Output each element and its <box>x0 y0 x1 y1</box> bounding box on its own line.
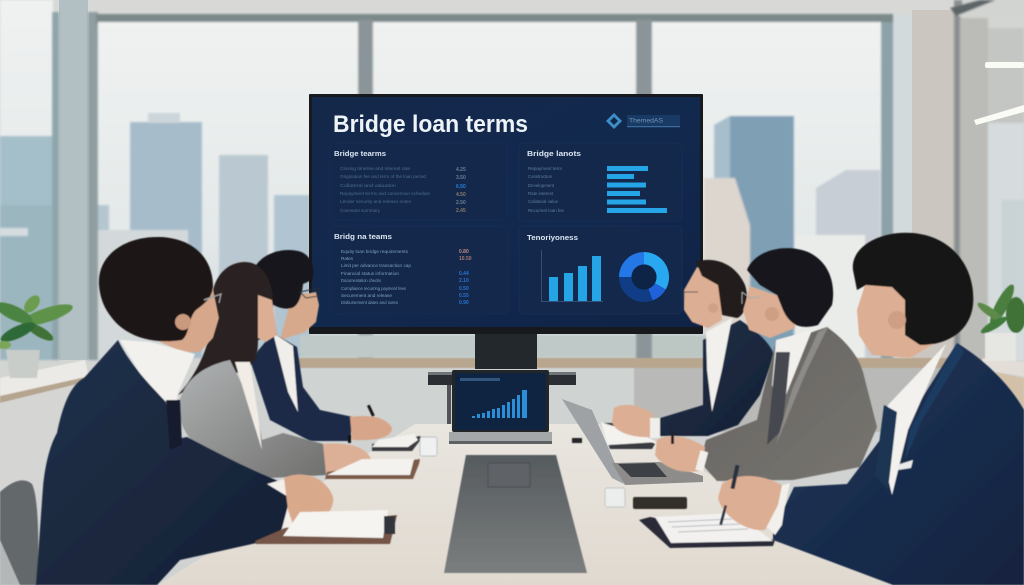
panel: charts <box>519 226 682 314</box>
plant: right <box>975 282 1024 361</box>
person: front left man <box>36 237 333 585</box>
panel: loan terms list: Securement and release <box>341 293 393 298</box>
panel: loan terms list: Equity loan bridge requirements <box>341 249 409 254</box>
laptop chart <box>472 390 527 418</box>
panel: bridge terms: 2.50 <box>456 200 466 206</box>
panel: bridge terms: Lender security and release notes <box>340 199 412 204</box>
panel: loan terms list: Documentation checks <box>341 278 382 283</box>
donut chart <box>619 252 669 302</box>
person: woman in grey <box>178 262 372 480</box>
column chart <box>541 250 603 302</box>
panel: bridge terms: Covenant summary <box>340 208 381 213</box>
person: middle right man in grey <box>655 248 877 481</box>
ceiling lights <box>974 62 1024 125</box>
horizontal bar chart <box>607 166 667 213</box>
clipboard: rear left <box>372 434 422 451</box>
panel: bridge terms: Repayment terms and conversion schedule <box>340 191 431 196</box>
panel: loan terms list: 0.90 <box>459 300 469 306</box>
panel: loan terms list: 0.80 <box>459 249 469 255</box>
wall display <box>309 94 703 334</box>
window sill <box>0 358 1024 490</box>
clipboard: front right <box>639 513 775 548</box>
person: back left man <box>250 250 392 441</box>
smartphone <box>633 497 687 509</box>
panel: loan terms list: 0.55 <box>459 293 469 299</box>
panel: bridge terms: 2.45 <box>456 208 466 214</box>
clipboard: rear right <box>572 422 657 449</box>
panel: loan terms list: Rates <box>341 256 354 261</box>
plant: left <box>0 292 75 378</box>
water glass: left <box>420 437 437 456</box>
panel: bridge loans bars: Collateral value <box>528 199 558 204</box>
panel: bridge loans bars: Bridge lanots <box>527 149 581 158</box>
front laptop <box>449 370 552 444</box>
logo and badge <box>606 113 680 129</box>
panel: bridge terms: Origination fee and term of the loan period <box>340 174 426 179</box>
panel: bridge terms: 4.50 <box>456 192 466 198</box>
panel: loan terms list: Compliance recurring payment fees <box>341 286 407 291</box>
panel: bridge terms: 4.25 <box>456 167 466 173</box>
panel: bridge terms: Bridge tearms <box>334 149 386 158</box>
panel: bridge terms: 6.50 <box>456 184 466 190</box>
panel: bridge loans bars: Repayment term <box>528 166 562 171</box>
panel: loan terms list: Financial status information <box>341 271 400 276</box>
office chair <box>0 480 38 585</box>
panel: loan terms list: 2.10 <box>459 278 469 284</box>
panel: loan terms list: Disbursement dates and notes <box>341 300 399 305</box>
back table clipboards: left <box>325 434 437 479</box>
slide title: Bridge loan terms <box>333 111 528 138</box>
clipboard: middle left <box>325 459 420 479</box>
table runner with cable port <box>444 455 587 573</box>
panel: loan terms list: 0.44 <box>459 271 469 277</box>
panel: loan terms list: 10.50 <box>459 256 472 262</box>
panel: bridge loans bars <box>519 143 682 221</box>
windows with city skyline <box>0 0 1024 360</box>
logo and badge: ThemedAS <box>629 118 663 124</box>
panel: bridge loans bars: Recurrent loan fee <box>528 208 564 213</box>
panel: bridge loans bars: Rate interest <box>528 191 554 196</box>
panel: bridge terms: Collateral and valuation <box>340 183 397 188</box>
panel: loan terms list: 0.50 <box>459 286 469 292</box>
water glass: right <box>605 488 625 507</box>
panel: bridge terms: Closing timeline and interest rate <box>340 166 411 171</box>
person: right back <box>572 260 774 449</box>
clipboard: front left <box>255 510 397 544</box>
panel: loan terms list: Limit per advance transaction cap <box>341 263 412 268</box>
right laptop <box>562 399 703 485</box>
panel: bridge loans bars: Construction <box>528 174 552 179</box>
conference table <box>158 424 895 585</box>
panel: charts: Tenoriyoness <box>527 233 578 242</box>
panel: bridge terms <box>330 143 507 220</box>
monitor stand and bracket <box>428 333 576 425</box>
panel: bridge terms: 3.50 <box>456 175 466 181</box>
panel: loan terms list <box>330 226 508 314</box>
panel: loan terms list: Bridg na teams <box>334 232 392 241</box>
panel: bridge loans bars: Development <box>528 183 555 188</box>
person: front right man <box>718 233 1024 585</box>
items on the table: right <box>605 488 775 548</box>
